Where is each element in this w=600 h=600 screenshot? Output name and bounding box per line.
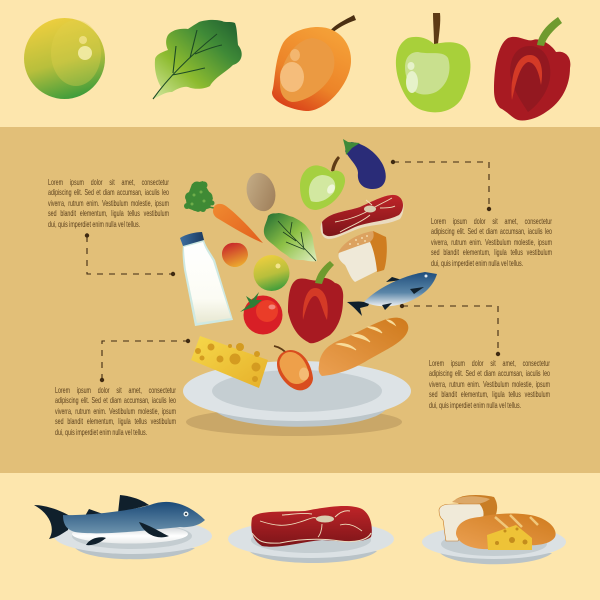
icon: baguette bbox=[319, 318, 408, 376]
icon: carrot bbox=[184, 181, 263, 243]
text block: upper right: adipiscing elit. Sed et diam accumsan, iaculis leo bbox=[431, 227, 552, 236]
text block: upper right: Lorem ipsum dolor sit amet, consectetur bbox=[431, 217, 552, 226]
icon: bread slice bbox=[338, 231, 387, 282]
text block: upper right: dui, quis imperdiet enim nulla vel tellus. bbox=[431, 259, 523, 268]
plate under fish bbox=[54, 518, 212, 559]
text block: lower right: sed blandit elementum, ligula tellus vestibulum bbox=[429, 390, 550, 399]
icon: small green apple bbox=[300, 156, 345, 210]
icon: green apple bbox=[396, 13, 470, 112]
text block: lower right: dui, quis imperdiet enim nulla vel tellus. bbox=[429, 401, 521, 410]
loaf bbox=[456, 513, 556, 549]
icon: steak bbox=[321, 195, 404, 239]
text block: upper left: dui, quis imperdiet enim nulla vel tellus. bbox=[48, 220, 140, 229]
text block: lower right: adipiscing elit. Sed et diam accumsan, iaculis leo bbox=[429, 369, 550, 378]
icon: small peach bbox=[274, 346, 313, 390]
icon: red apple bbox=[222, 243, 248, 267]
connector: fish to lower right text bbox=[400, 304, 500, 356]
plate: steak dish bbox=[228, 506, 394, 563]
text block: upper right: viverra, rutrum enim. Vestibulum molestie, ipsum bbox=[431, 238, 552, 247]
icon: small lime bbox=[254, 255, 290, 291]
background band bbox=[0, 127, 600, 473]
icon: red pepper bbox=[494, 17, 570, 121]
plate with shadow bbox=[183, 361, 411, 436]
text block: lower right: viverra, rutrum enim. Vestibulum molestie, ipsum bbox=[429, 380, 550, 389]
text block: upper left: Lorem ipsum dolor sit amet, consectetur bbox=[48, 178, 169, 187]
steak bbox=[251, 506, 372, 547]
icon: big red pepper bbox=[288, 261, 343, 343]
icon: lettuce leaf bbox=[153, 20, 242, 99]
text block: lower left: dui, quis imperdiet enim nulla vel tellus. bbox=[55, 428, 147, 437]
text block: upper left: sed blandit elementum, ligula tellus vestibulum bbox=[48, 209, 169, 218]
text block: upper right: sed blandit elementum, ligula tellus vestibulum bbox=[431, 248, 552, 257]
icon: lettuce bbox=[264, 213, 317, 261]
connector: eggplant to right text bbox=[391, 160, 491, 211]
text block: lower left: sed blandit elementum, ligula tellus vestibulum bbox=[55, 417, 176, 426]
bread slice bbox=[439, 495, 497, 541]
text block: lower left: viverra, rutrum enim. Vestibulum molestie, ipsum bbox=[55, 407, 176, 416]
icon: eggplant bbox=[343, 139, 386, 189]
connector: cheese to lower left text bbox=[100, 339, 190, 382]
text block: lower right: Lorem ipsum dolor sit amet, consectetur bbox=[429, 359, 550, 368]
text block: upper left bbox=[48, 178, 169, 229]
plate: fish dish bbox=[34, 495, 212, 559]
icon: fish bbox=[347, 272, 437, 316]
text block: upper right bbox=[431, 217, 552, 268]
icon: tomato bbox=[240, 292, 282, 334]
text block: upper left: viverra, rutrum enim. Vestibulum molestie, ipsum bbox=[48, 199, 169, 208]
fish on plate bbox=[34, 495, 205, 545]
cheese bbox=[487, 525, 532, 550]
plate: bread and cheese dish bbox=[422, 495, 566, 564]
icon: peach bbox=[272, 15, 356, 111]
text block: lower left: Lorem ipsum dolor sit amet, consectetur bbox=[55, 386, 176, 395]
text block: lower left bbox=[55, 386, 176, 437]
text block: lower left: adipiscing elit. Sed et diam accumsan, iaculis leo bbox=[55, 396, 176, 405]
connector: left text to bottle bbox=[85, 233, 175, 276]
icon: potato bbox=[242, 170, 280, 214]
icon: milk bottle bbox=[180, 232, 233, 326]
icon: cheese wedge bbox=[191, 336, 268, 388]
icon: lime bbox=[24, 18, 105, 99]
text block: upper left: adipiscing elit. Sed et diam accumsan, iaculis leo bbox=[48, 188, 169, 197]
text block: lower right bbox=[429, 359, 550, 410]
